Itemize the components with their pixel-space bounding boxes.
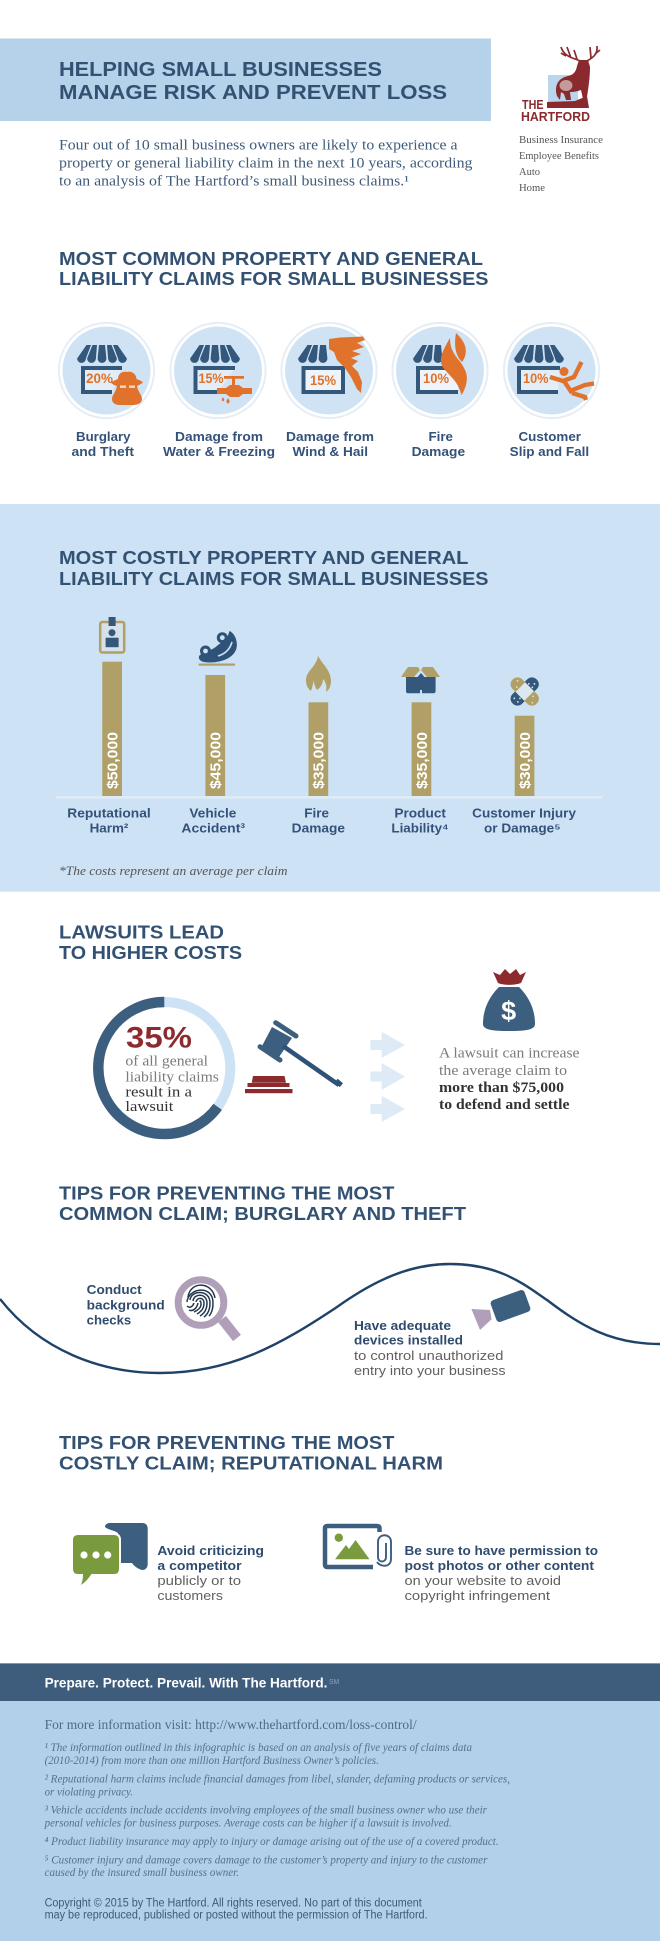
heading: most common claims: MOST COMMON PROPERTY AND GENERAL (59, 249, 483, 269)
heading: common claim tips: TIPS FOR PREVENTING THE MOST (59, 1183, 394, 1203)
icon: photo with paperclip (325, 1526, 391, 1567)
copyright: may be reproduced, published or posted without the permission of The Hartford. (45, 1909, 428, 1921)
bar chart: $35,000 (312, 732, 328, 789)
more information link: For more information visit: http://www.thehartford.com/loss-control/ (45, 1718, 417, 1733)
labels: common claims: Water & Freezing (163, 445, 275, 459)
labels: common claims: Slip and Fall (510, 445, 589, 459)
tip: avoid criticizing: customers (157, 1588, 224, 1603)
icon: crossed bandages (508, 675, 542, 708)
tip: background checks: Conduct (87, 1282, 142, 1297)
heading: most costly claims: MOST COSTLY PROPERTY AND GENERAL (59, 548, 468, 568)
icon: water 15% (170, 323, 266, 418)
icon: overturned car (199, 632, 236, 666)
icon: speech bubbles (72, 1523, 148, 1587)
icon: fire 10% (392, 323, 488, 418)
footnotes (44, 1742, 510, 1879)
heading: lawsuits: LAWSUITS LEAD (59, 922, 224, 942)
lawsuit cost text: the average claim to (439, 1063, 567, 1079)
icon: slip and fall 10%: 10% (523, 371, 548, 386)
tagline bar: SM (329, 1679, 339, 1686)
bar chart: $50,000 (106, 732, 122, 789)
tip: avoid criticizing (157, 1543, 264, 1603)
stat caption: liability claims (125, 1070, 219, 1086)
labels: common claims: Fire (428, 430, 453, 444)
labels: common claims: Damage (412, 445, 465, 459)
tagline bar: Prepare. Protect. Prevail. With The Hartford. (45, 1675, 327, 1691)
tip: permission: Be sure to have permission to (404, 1543, 598, 1558)
icon: money bag (483, 969, 535, 1031)
labels: costly claims: Product (394, 807, 447, 821)
heading: costly claim tips (59, 1433, 443, 1473)
panel: most costly claims (0, 504, 660, 892)
icon: wind and hail 15% (281, 323, 377, 418)
copyright: Copyright © 2015 by The Hartford. All rights reserved. No part of this document (45, 1897, 422, 1909)
tip: avoid criticizing: a competitor (157, 1558, 242, 1573)
labels: costly claims: Harm² (90, 822, 128, 836)
icon: money bag: $ (501, 996, 516, 1026)
heading: common claim tips (59, 1183, 466, 1224)
lawsuit cost text: more than $75,000 (439, 1080, 564, 1096)
tip: adequate devices (354, 1318, 506, 1378)
labels: common claims: Burglary (76, 430, 131, 444)
lawsuit cost text (439, 1046, 580, 1113)
donut chart: 35% (98, 1002, 230, 1134)
chart footnote: *The costs represent an average per claim (59, 864, 288, 878)
labels: costly claims: Fire (304, 807, 329, 821)
labels: costly claims (67, 807, 576, 836)
stat caption: result in a (125, 1085, 192, 1101)
tip: adequate devices: to control unauthorized (354, 1348, 503, 1363)
labels: costly claims: Customer Injury (472, 807, 576, 821)
title: MANAGE RISK AND PREVENT LOSS (59, 82, 447, 104)
labels: costly claims: Vehicle (189, 807, 236, 821)
bar chart: $45,000 (209, 732, 225, 789)
labels: common claims: and Theft (72, 445, 135, 459)
icon: security camera (471, 1289, 531, 1330)
tip: background checks (87, 1282, 165, 1327)
icon: water 15%: 15% (198, 371, 224, 386)
labels: costly claims: Damage (292, 822, 345, 836)
labels: costly claims: Liability⁴ (391, 822, 449, 836)
icon: wind and hail 15%: 15% (310, 373, 336, 388)
tip: adequate devices: Have adequate (354, 1318, 451, 1333)
stat caption (125, 1054, 219, 1115)
product list: Auto (519, 167, 540, 178)
product list: Business Insurance (519, 135, 603, 146)
labels: costly claims: or Damage⁵ (484, 822, 561, 836)
icon: burglary 20% (59, 323, 154, 418)
logo: The Hartford stag (521, 46, 600, 124)
heading: lawsuits (59, 922, 242, 963)
tip: avoid criticizing: publicly or to (157, 1573, 241, 1588)
title: HELPING SMALL BUSINESSES (59, 59, 382, 81)
arrows (370, 1032, 405, 1122)
tip: background checks: background (87, 1297, 165, 1312)
footnotes: ¹ The information outlined in this infographic is based on an analysis of five years of claims data (45, 1742, 472, 1754)
product list: Employee Benefits (519, 151, 599, 162)
icon: fire 10%: 10% (423, 371, 449, 386)
heading: most costly claims: LIABILITY CLAIMS FOR SMALL BUSINESSES (59, 569, 488, 589)
footnotes: ³ Vehicle accidents include accidents involving employees of the small business owner who use their (45, 1804, 487, 1816)
icon: burglary 20%: 20% (86, 371, 113, 386)
header banner (0, 38, 491, 121)
icon: slip and fall 10% (504, 323, 599, 418)
icon: gavel (245, 1023, 343, 1093)
footnotes: personal vehicles for business purposes. Average costs can be higher if a lawsuit is involved. (44, 1817, 452, 1829)
heading: costly claim tips: COSTLY CLAIM; REPUTATIONAL HARM (59, 1453, 443, 1473)
heading: costly claim tips: TIPS FOR PREVENTING THE MOST (59, 1433, 394, 1453)
labels: common claims: Wind & Hail (292, 445, 368, 459)
footnotes: or violating privacy. (45, 1786, 133, 1798)
panel: footer (0, 1663, 660, 1941)
logo: The Hartford stag: THE (522, 97, 544, 112)
stat: 35%: 35% (126, 1022, 192, 1055)
copyright (45, 1897, 428, 1921)
tip: permission: on your website to avoid (404, 1573, 561, 1588)
lawsuit cost text: to defend and settle (439, 1097, 570, 1113)
labels: costly claims: Reputational (67, 807, 151, 821)
bar chart: $35,000 (415, 732, 431, 789)
bar chart (56, 662, 602, 799)
footnotes: ⁵ Customer injury and damage covers damage to the customer’s property and injury to the customer (45, 1854, 488, 1866)
product list: Home (519, 183, 545, 194)
labels: common claims: Customer (518, 430, 581, 444)
intro text: to an analysis of The Hartford’s small business claims.¹ (59, 174, 409, 190)
icon: flame (306, 656, 331, 692)
tagline bar (0, 1663, 660, 1701)
icon: ID badge (100, 617, 124, 652)
icon: open box (401, 667, 440, 693)
logo: The Hartford stag: HARTFORD (521, 109, 590, 124)
labels: common claims: Damage from (175, 430, 263, 444)
heading: common claim tips: COMMON CLAIM; BURGLARY AND THEFT (59, 1204, 466, 1224)
intro text: property or general liability claim in the next 10 years, according (59, 156, 472, 172)
icon: magnifier fingerprint (178, 1280, 237, 1338)
heading: most common claims (59, 249, 488, 289)
wave line (0, 1264, 660, 1373)
tip: permission: post photos or other content (404, 1558, 595, 1573)
heading: most common claims: LIABILITY CLAIMS FOR SMALL BUSINESSES (59, 269, 488, 289)
footnotes: ² Reputational harm claims include financial damages from libel, slander, defaming products or services, (45, 1773, 510, 1785)
bar chart: $30,000 (518, 732, 534, 789)
heading: most costly claims (59, 548, 488, 589)
stat caption: lawsuit (125, 1099, 174, 1115)
tip: permission (404, 1543, 598, 1603)
heading: lawsuits: TO HIGHER COSTS (59, 943, 242, 963)
tip: avoid criticizing: Avoid criticizing (157, 1543, 264, 1558)
labels: common claims (72, 430, 589, 459)
title (59, 59, 447, 104)
footnotes: caused by the insured small business owner. (45, 1867, 239, 1879)
labels: costly claims: Accident³ (181, 822, 245, 836)
labels: common claims: Damage from (286, 430, 374, 444)
product list (519, 135, 603, 194)
footnotes: ⁴ Product liability insurance may apply to injury or damage arising out of the use of a covered product. (45, 1836, 499, 1848)
stat caption: of all general (125, 1054, 208, 1070)
intro text: Four out of 10 small business owners are likely to experience a (59, 138, 458, 154)
tip: permission: copyright infringement (404, 1588, 550, 1603)
tip: background checks: checks (87, 1312, 131, 1327)
footnotes: (2010-2014) from more than one million Hartford Business Owner’s policies. (45, 1755, 379, 1767)
intro text (59, 138, 472, 190)
lawsuit cost text: A lawsuit can increase (439, 1046, 580, 1062)
tip: adequate devices: entry into your business (354, 1363, 506, 1378)
tip: adequate devices: devices installed (354, 1333, 463, 1348)
